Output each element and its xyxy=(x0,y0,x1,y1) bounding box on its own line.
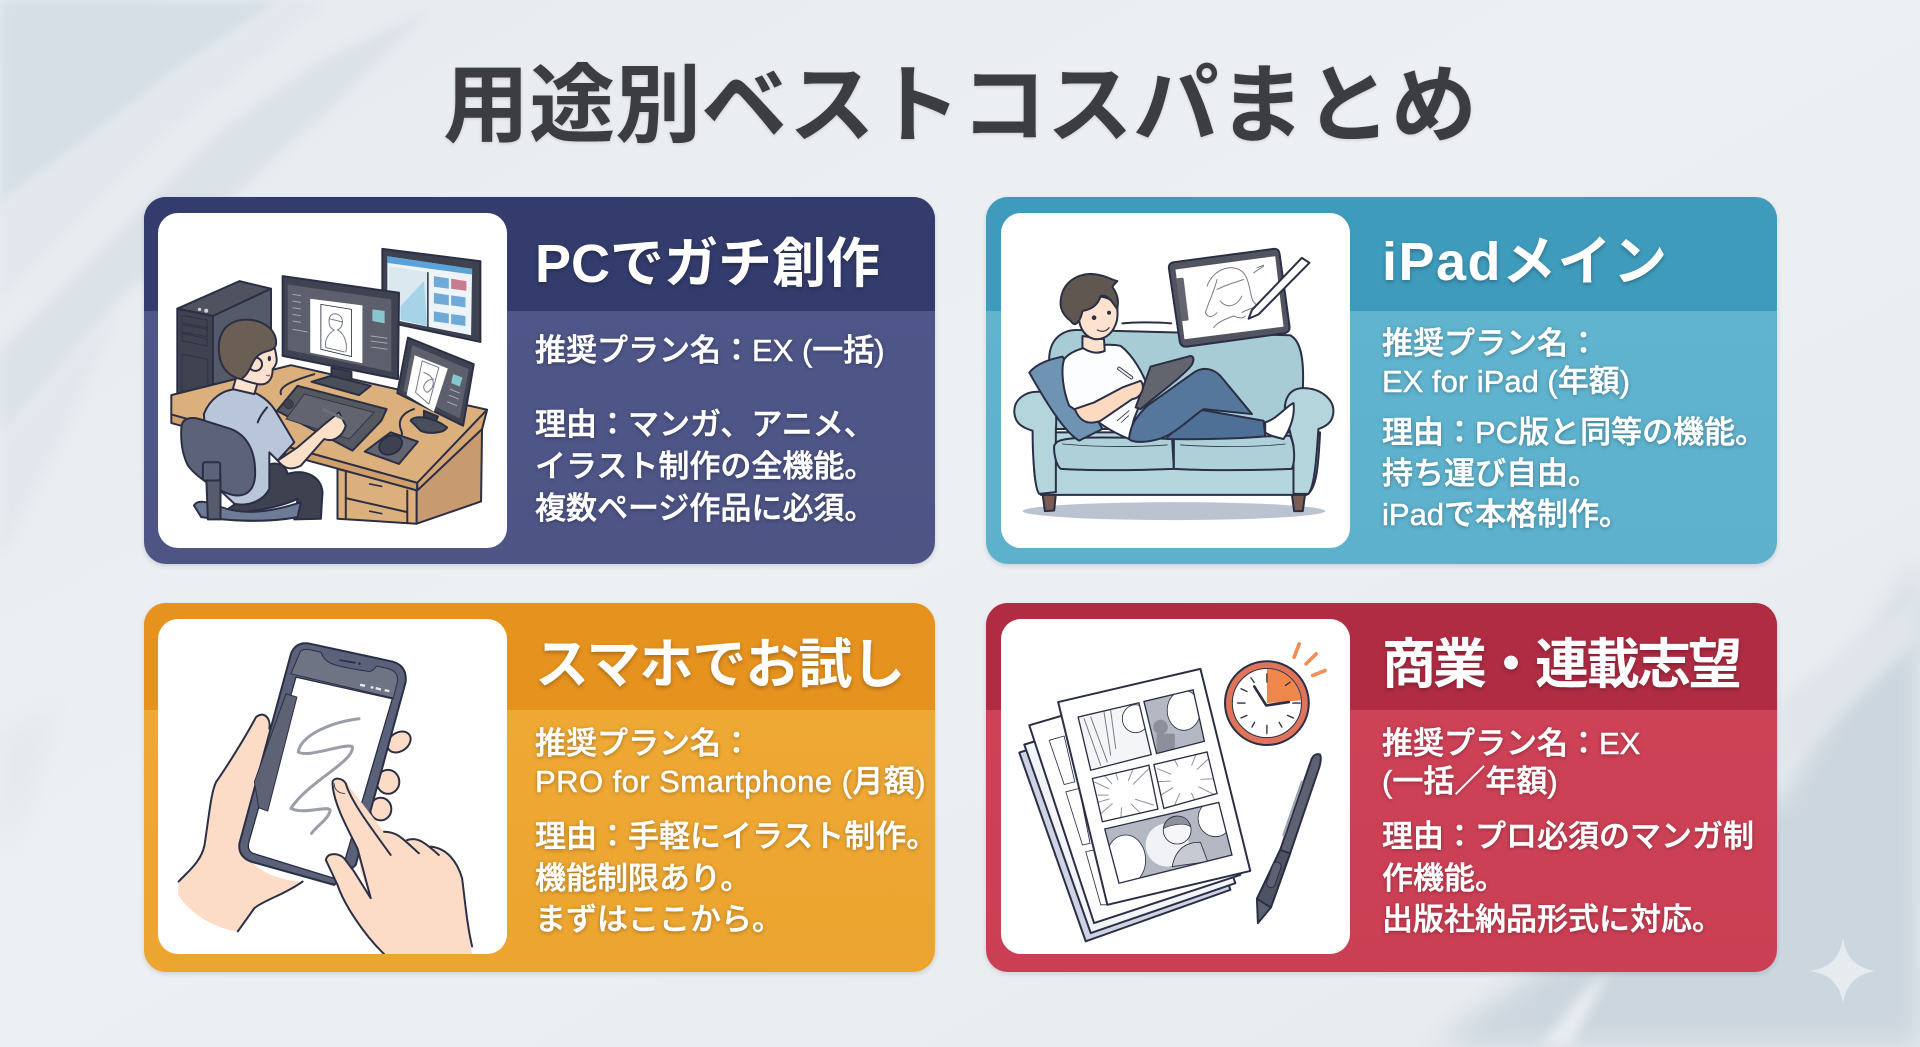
pen tablet xyxy=(277,386,387,451)
recommended plan: PRO for Smartphone (月額) xyxy=(535,764,926,799)
reason: 理由：プロ必須のマンガ制 xyxy=(1382,819,1754,854)
pillow xyxy=(1029,357,1102,441)
desk xyxy=(171,365,487,524)
recommended plan xyxy=(534,726,926,802)
panel header band xyxy=(144,197,935,311)
heading: iPadメイン xyxy=(1382,232,1669,292)
recommended plan xyxy=(1381,726,1640,801)
recommended plan: (一括／年額) xyxy=(1382,764,1558,799)
illustration: artist at desk with PC and monitors xyxy=(158,213,507,548)
recommended plan: 推奨プラン名：EX (一括) xyxy=(535,333,885,368)
panel header band xyxy=(986,197,1777,311)
right hand xyxy=(326,779,472,954)
clock xyxy=(1225,644,1325,745)
back monitor xyxy=(382,249,480,342)
mouse and pad xyxy=(365,431,418,464)
heading: PCでガチ創作 xyxy=(535,234,880,294)
heading: スマホでお試し xyxy=(535,635,904,695)
panel header band xyxy=(986,603,1777,710)
right monitor xyxy=(396,338,474,439)
reason: まずはここから。 xyxy=(535,902,783,937)
reason: 持ち運び自由。 xyxy=(1382,456,1599,491)
reason xyxy=(534,819,935,937)
reason: 作機能。 xyxy=(1382,860,1506,896)
title: 用途別ベストコスパまとめ xyxy=(443,58,1477,154)
illustration: manga pages, clock and pen xyxy=(1001,619,1350,954)
panel: スマホでお試し xyxy=(144,603,935,972)
panel header band xyxy=(144,603,935,710)
office chair xyxy=(181,418,301,521)
illustration: hands with smartphone xyxy=(158,619,507,954)
floating tablet with drawing xyxy=(1122,249,1309,347)
reason: 理由：マンガ、アニメ、 xyxy=(535,407,875,442)
reason xyxy=(1382,819,1754,937)
reason xyxy=(535,407,875,526)
reason: 出版社納品形式に対応。 xyxy=(1382,902,1723,937)
icon: sparkle watermark xyxy=(1811,939,1875,1003)
main monitor xyxy=(283,276,399,395)
sofa xyxy=(1014,330,1333,520)
reason: iPadで本格制作。 xyxy=(1382,497,1630,532)
manga panels xyxy=(1078,690,1233,885)
recommended plan: EX for iPad (年額) xyxy=(1382,364,1630,399)
recommended plan xyxy=(1381,326,1630,401)
PC tower xyxy=(177,281,271,409)
left hand and back fingers xyxy=(178,715,415,931)
heading: 商業・連載志望 xyxy=(1382,635,1739,695)
reason: イラスト制作の全機能。 xyxy=(535,449,875,484)
reason xyxy=(1382,415,1766,532)
recommended plan: 推奨プラン名： xyxy=(535,726,752,761)
reason: 理由：手軽にイラスト制作。 xyxy=(535,819,935,854)
reason: 機能制限あり。 xyxy=(535,860,751,896)
illustration: person on sofa with iPad xyxy=(1001,213,1350,548)
panel: iPadメイン xyxy=(986,197,1777,564)
manga page stack xyxy=(1019,669,1250,941)
reason: 複数ページ作品に必須。 xyxy=(535,491,875,526)
panel: 商業・連載志望 xyxy=(986,603,1777,972)
smartphone xyxy=(239,643,406,885)
seated person xyxy=(204,320,346,519)
stylus pen xyxy=(1257,754,1321,923)
panel: PCでガチ創作 xyxy=(144,197,935,564)
recommended plan: 推奨プラン名：EX xyxy=(1382,726,1640,761)
recommended plan: 推奨プラン名： xyxy=(1382,326,1599,361)
reason: 理由：PC版と同等の機能。 xyxy=(1382,415,1766,450)
person relaxing xyxy=(1061,274,1294,442)
